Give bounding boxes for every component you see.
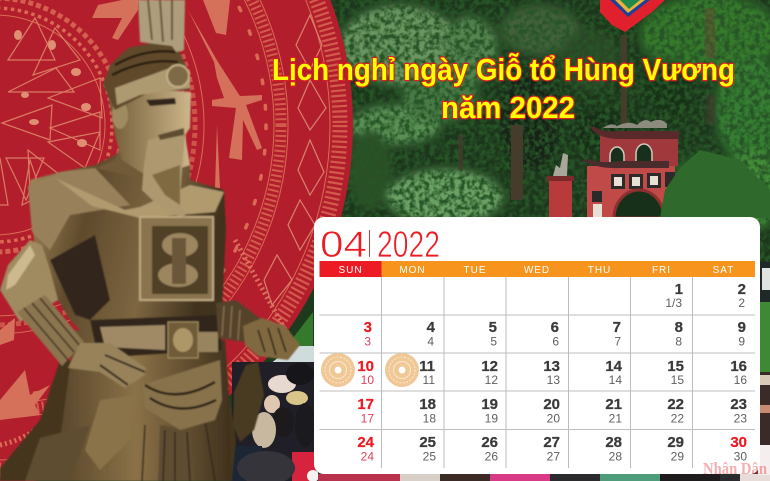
statue: left hand [68, 343, 146, 388]
calendar dates: 27 [547, 450, 560, 464]
calendar dates: 24 [361, 450, 374, 464]
calendar dates: 11 [423, 373, 435, 387]
temple gate [547, 120, 770, 218]
calendar dates: 20 [543, 396, 560, 413]
calendar dates: 9 [738, 334, 745, 348]
calendar dates: 25 [419, 434, 436, 451]
statue: right arm and fist [216, 300, 262, 342]
statue: apron [142, 360, 222, 430]
calendar month and year heading [320, 224, 440, 265]
statue: belt [90, 315, 222, 358]
red bronze drum disc [0, 0, 353, 481]
calendar dates: 30 [730, 434, 747, 451]
weekday header: SAT [713, 265, 734, 276]
calendar dates: 7 [614, 334, 621, 348]
calendar dates: 30 [734, 450, 747, 464]
calendar dates: 6 [551, 319, 559, 336]
bird motifs [92, 0, 262, 188]
calendar dates: 12 [481, 358, 498, 375]
calendar dates: 8 [675, 334, 682, 348]
calendar dates: 25 [423, 450, 436, 464]
title [272, 52, 735, 125]
statue: shield [233, 362, 264, 442]
icon: bronze drum holiday marker 10 [321, 353, 355, 387]
calendar dates: 19 [481, 396, 498, 413]
weekday header: MON [399, 265, 426, 276]
calendar dates: 15 [667, 358, 684, 375]
weekday header: WED [524, 265, 550, 276]
calendar dates: 12 [485, 373, 498, 387]
statue: torso [30, 150, 226, 345]
statue: turban [103, 42, 190, 110]
calendar dates: 5 [489, 319, 497, 336]
weekday header: FRI [652, 265, 671, 276]
calendar dates: 14 [605, 358, 623, 375]
calendar dates [357, 281, 747, 464]
icon: bronze drum holiday marker 11 [385, 353, 419, 387]
calendar dates: 29 [667, 434, 684, 451]
calendar dates: 17 [361, 412, 374, 426]
flag [600, 0, 665, 32]
calendar dates: 17 [357, 396, 374, 413]
statue of Hung King [0, 0, 300, 481]
calendar dates: 26 [481, 434, 498, 451]
calendar dates: 3 [364, 319, 372, 336]
background: forest photo [330, 0, 770, 320]
calendar dates: 26 [485, 450, 498, 464]
calendar dates: 2 [738, 281, 746, 298]
calendar dates: 1/3 [665, 296, 682, 310]
calendar dates: 18 [419, 396, 436, 413]
weekday header: TUE [464, 265, 486, 276]
calendar dates: 6 [552, 334, 559, 348]
calendar dates: 14 [609, 373, 622, 387]
calendar dates: 20 [547, 412, 560, 426]
statue: left arm [0, 240, 58, 322]
calendar dates: 24 [357, 434, 375, 451]
calendar dates: 28 [605, 434, 622, 451]
weekday header [320, 261, 755, 277]
calendar dates: 23 [734, 412, 747, 426]
calendar dates: 16 [730, 358, 747, 375]
calendar month and year heading: 2022 [377, 224, 440, 265]
calendar dates: 4 [427, 319, 436, 336]
calendar dates: 4 [427, 334, 434, 348]
calendar dates: 1 [675, 281, 683, 298]
calendar dates: 22 [671, 412, 684, 426]
weekday header: SUN [338, 265, 363, 276]
calendar card [314, 217, 760, 474]
tree trunks [458, 8, 715, 200]
calendar dates: 13 [543, 358, 560, 375]
calendar dates: 10 [357, 358, 374, 375]
calendar dates: 10 [361, 373, 374, 387]
weekday header: THU [588, 265, 611, 276]
statue: chest plate [140, 217, 213, 300]
rhombus motifs [264, 15, 326, 305]
calendar dates: 27 [543, 434, 560, 451]
calendar dates: 21 [605, 396, 622, 413]
calendar dates: 21 [609, 412, 622, 426]
title line 2: năm 2022 [441, 90, 575, 125]
calendar dates: 19 [485, 412, 498, 426]
calendar dates: 23 [730, 396, 747, 413]
calendar month and year heading: 04 [320, 224, 367, 265]
lower left motifs [0, 318, 50, 420]
statue: cape and lower skirt [0, 360, 236, 481]
calendar dates: 3 [364, 334, 371, 348]
calendar dates: 28 [609, 450, 622, 464]
calendar dates: 5 [490, 334, 497, 348]
calendar dates: 29 [671, 450, 684, 464]
crowd photo [230, 262, 770, 481]
statue: beard and head [95, 125, 150, 180]
statue: feather crest [138, 0, 185, 52]
calendar dates: 2 [738, 296, 745, 310]
mandala star [0, 18, 102, 205]
calendar dates: 16 [734, 373, 747, 387]
calendar dates: 7 [613, 319, 621, 336]
calendar dates: 15 [671, 373, 684, 387]
calendar dates: 22 [667, 396, 684, 413]
calendar dates: 18 [423, 412, 436, 426]
calendar dates: 8 [675, 319, 683, 336]
calendar dates: 13 [547, 373, 560, 387]
calendar dates: 11 [419, 358, 435, 375]
calendar dates: 9 [738, 319, 746, 336]
